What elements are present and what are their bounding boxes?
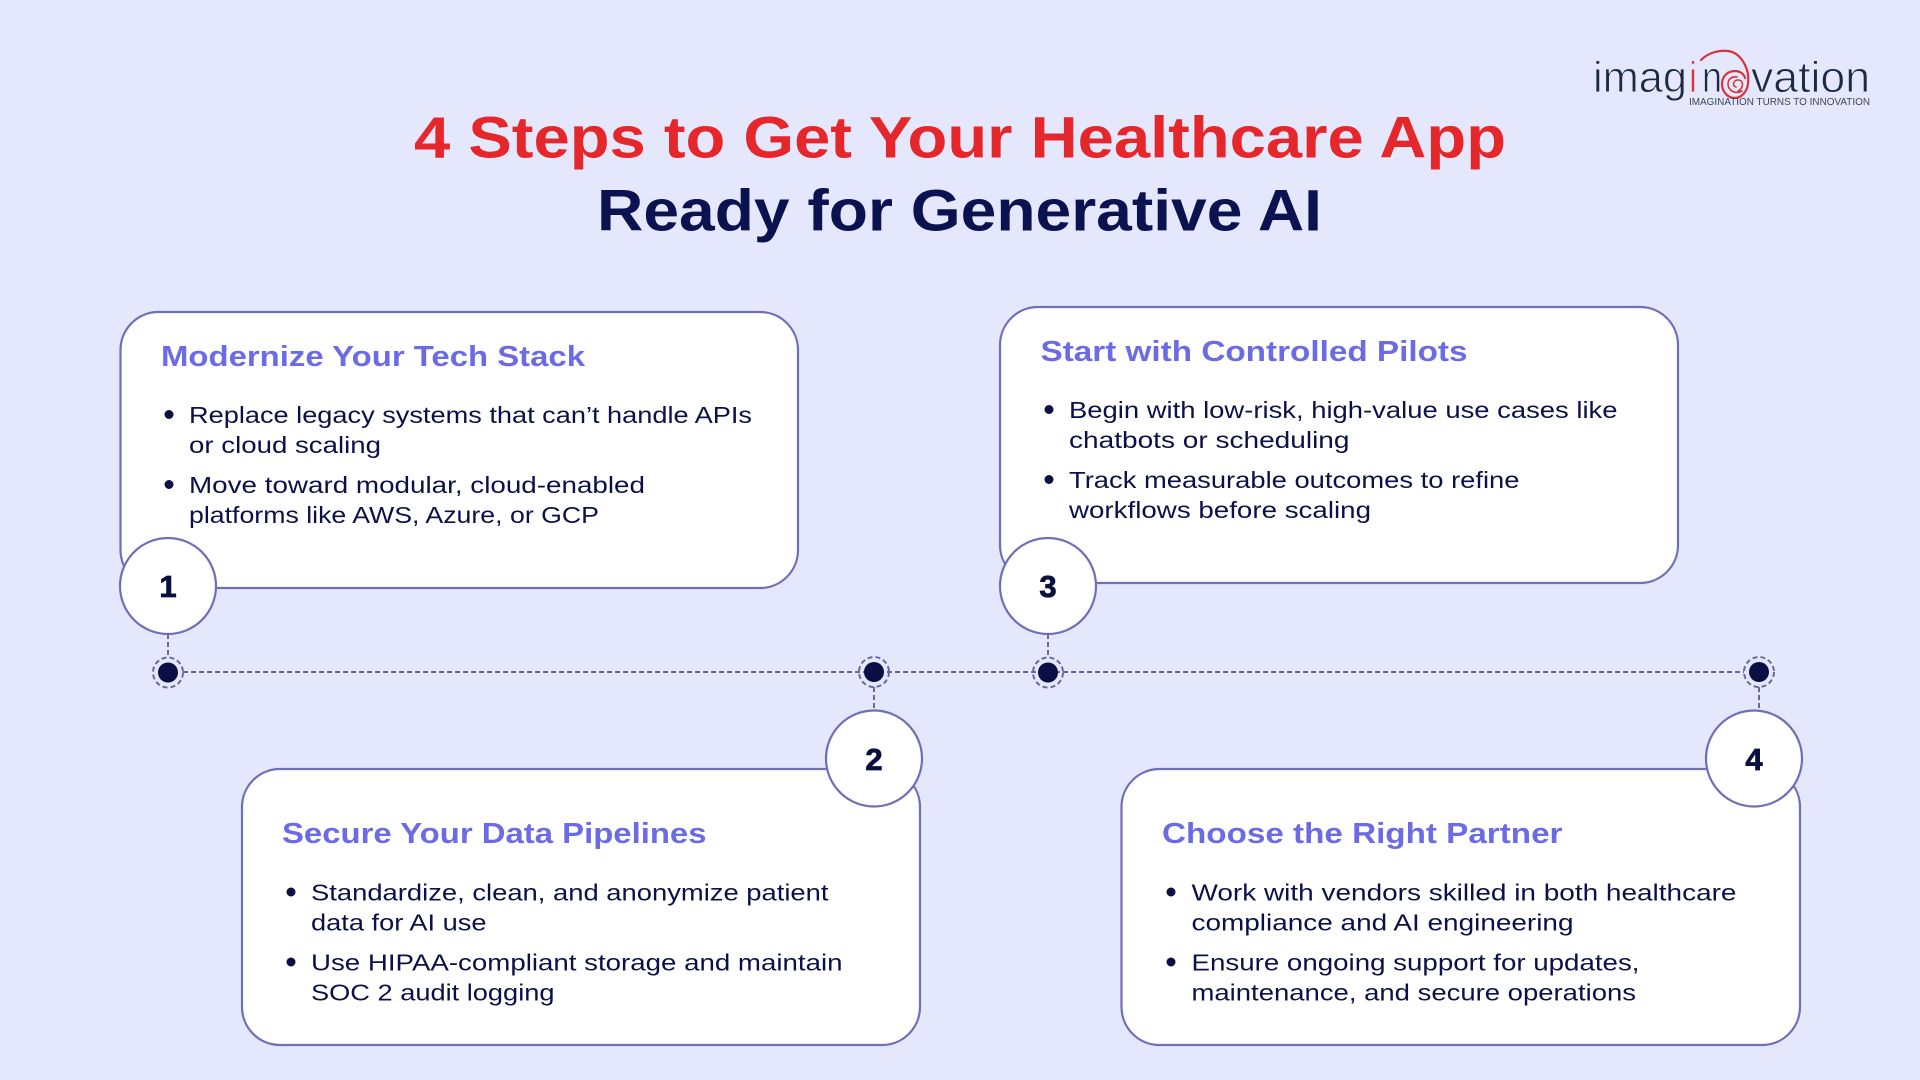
panel: step 1: [120, 312, 798, 634]
bullets 4: compliance and AI engineering: [1192, 910, 1574, 936]
logo swirl: [1701, 51, 1748, 98]
bullets 2: [286, 880, 842, 1006]
timeline node 4: [1744, 657, 1774, 687]
title: [414, 106, 1506, 244]
card 2: [242, 769, 920, 1045]
bullets 3: Track measurable outcomes to refine: [1069, 467, 1520, 493]
heading 3: Start with Controlled Pilots: [1040, 336, 1468, 368]
bullets 3: workflows before scaling: [1068, 497, 1371, 523]
timeline node 3: [1033, 658, 1063, 688]
connector 1: [167, 634, 169, 657]
timeline node 1: [153, 658, 183, 688]
number badge 1: [120, 538, 216, 634]
logo tagline: IMAGINATION TURNS TO INNOVATION: [1689, 97, 1870, 108]
bullets 3: Begin with low-risk, high-value use cases like: [1069, 397, 1618, 423]
logo wordmark: imag: [1593, 53, 1687, 102]
number badge 4: 4: [1745, 742, 1763, 777]
card 3: [1000, 307, 1678, 583]
card 1: [120, 312, 798, 588]
timeline dashed line: [183, 671, 1744, 673]
logo wordmark: i: [1689, 53, 1697, 102]
bullets 1: or cloud scaling: [189, 432, 381, 458]
connector 4: [1758, 687, 1760, 711]
card 4: [1122, 769, 1800, 1045]
bullets 1: [164, 402, 752, 528]
bullets 4: [1166, 880, 1736, 1006]
logo: imaginovation: [1593, 51, 1870, 108]
bullets 2: Use HIPAA-compliant storage and maintain: [311, 950, 842, 976]
title line 1: 4 Steps to Get Your Healthcare App: [414, 106, 1506, 170]
bullets 4: Work with vendors skilled in both healthcare: [1192, 880, 1736, 906]
number badge 2: [826, 710, 922, 806]
logo wordmark: n: [1702, 53, 1722, 102]
bullets 4: maintenance, and secure operations: [1192, 980, 1636, 1006]
bullets 2: SOC 2 audit logging: [311, 980, 554, 1006]
bullets 1: Move toward modular, cloud-enabled: [189, 472, 645, 498]
bullets 2: data for AI use: [311, 910, 486, 936]
bullets 2: Standardize, clean, and anonymize patient: [311, 880, 829, 906]
number badge 4: [1706, 710, 1802, 806]
number badge 3: 3: [1039, 569, 1057, 604]
timeline: [153, 634, 1774, 711]
panel: step 3: [1000, 307, 1678, 634]
number badge 2: 2: [865, 742, 883, 777]
bullets 1: Replace legacy systems that can’t handle APIs: [189, 402, 752, 428]
logo wordmark: vation: [1751, 53, 1870, 102]
panel: step 2: [242, 710, 922, 1045]
panel: step 4: [1122, 710, 1802, 1045]
heading 2: Secure Your Data Pipelines: [282, 818, 706, 850]
heading 1: Modernize Your Tech Stack: [161, 341, 586, 373]
heading 4: Choose the Right Partner: [1162, 818, 1562, 850]
number badge 3: [1000, 538, 1096, 634]
connector 3: [1047, 634, 1049, 657]
number badge 1: 1: [159, 569, 177, 604]
bullets 3: [1044, 397, 1618, 523]
connector 2: [873, 687, 875, 710]
title line 2: Ready for Generative AI: [597, 178, 1322, 244]
timeline node 2: [859, 657, 889, 687]
bullets 4: Ensure ongoing support for updates,: [1192, 950, 1640, 976]
bullets 1: platforms like AWS, Azure, or GCP: [189, 502, 599, 528]
bullets 3: chatbots or scheduling: [1069, 427, 1350, 453]
